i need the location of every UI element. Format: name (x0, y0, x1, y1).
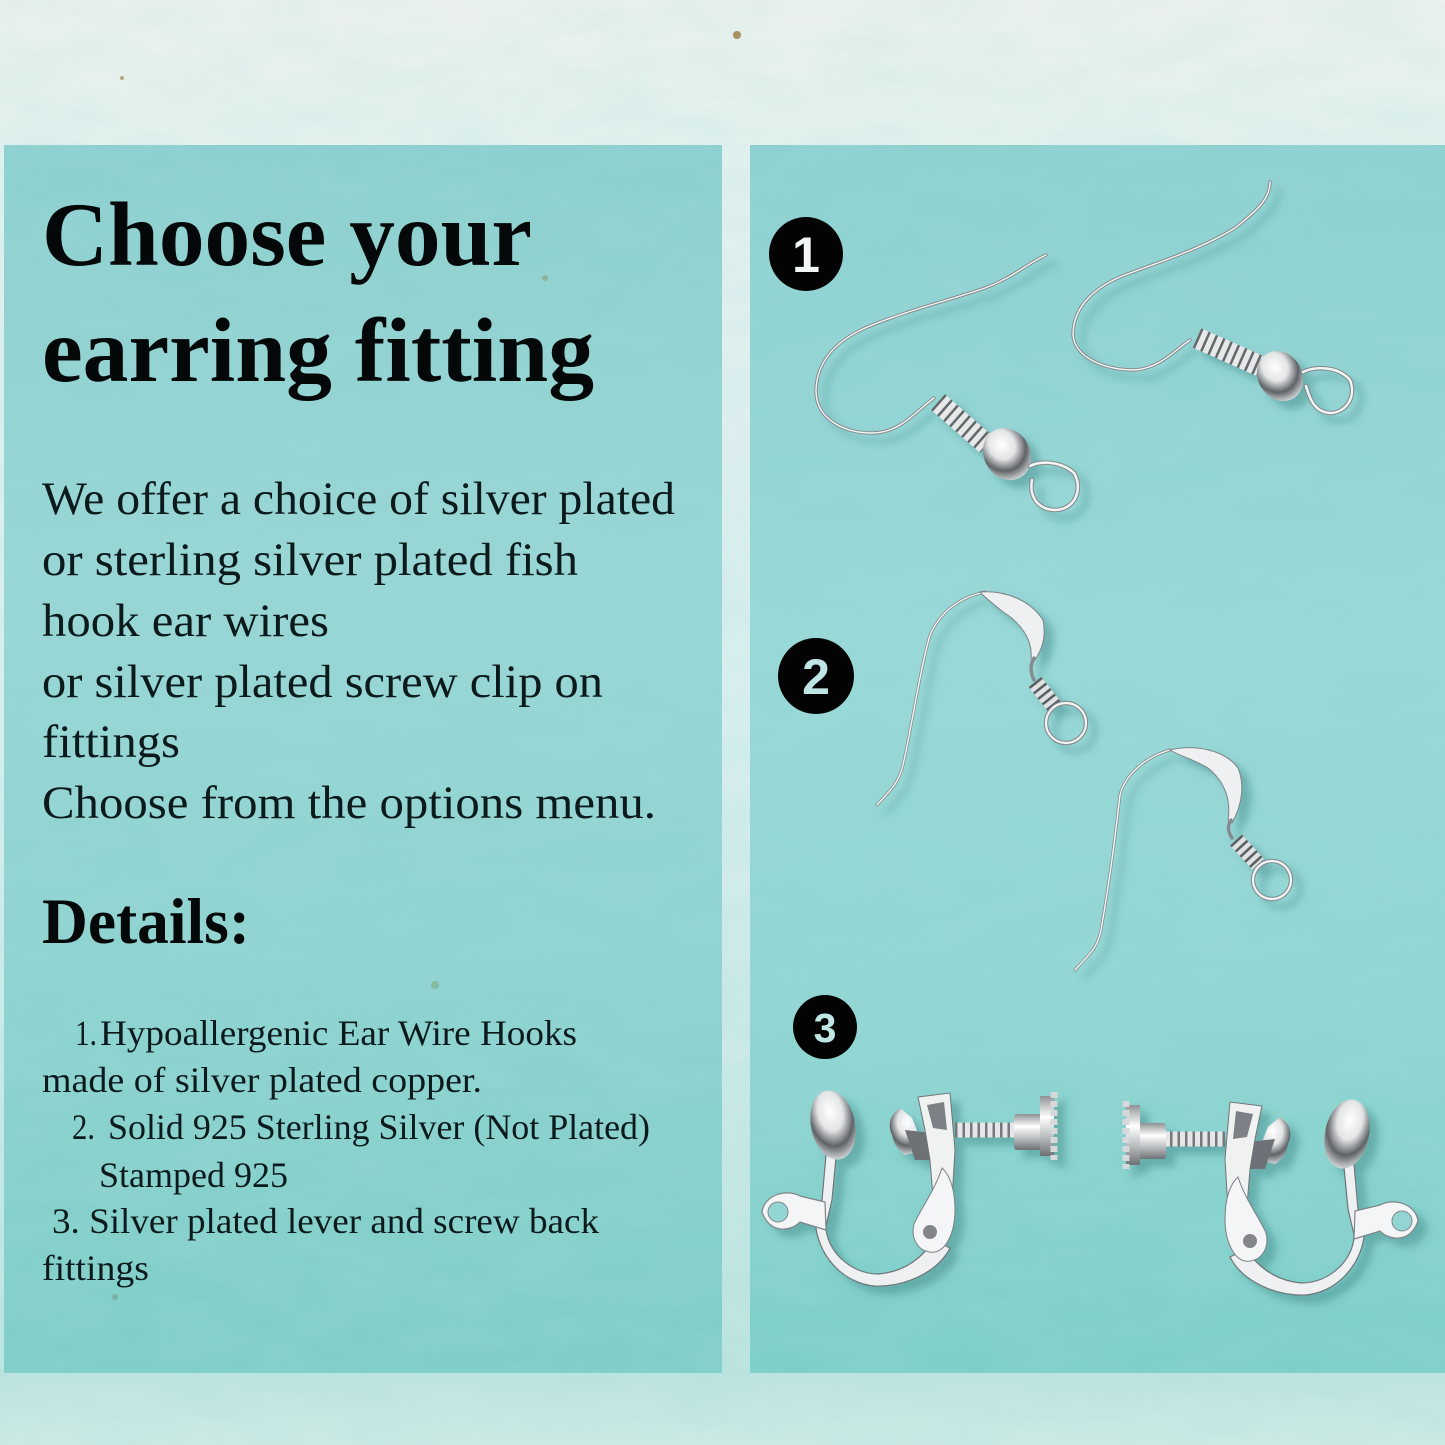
details list: made of silver plated copper. (42, 1060, 482, 1100)
intro text block: or silver plated screw clip on (42, 656, 603, 708)
intro text block: Choose from the options menu. (42, 777, 656, 829)
panel: fittings (750, 145, 1445, 1373)
title (42, 184, 594, 401)
badge 3: 3 (814, 1005, 836, 1051)
badge 3 (793, 995, 857, 1059)
right clip (1126, 1095, 1418, 1295)
details list: Stamped 925 (99, 1155, 288, 1195)
upper wire (877, 592, 1086, 805)
details list: Solid 925 Sterling Silver (Not Plated) (108, 1107, 650, 1147)
fitting 3: screw clip-ons (762, 1086, 1418, 1295)
fitting 2: sterling silver ear wires (877, 592, 1291, 970)
left hook (816, 255, 1078, 510)
intro text block: or sterling silver plated fish (42, 534, 578, 586)
details list: fittings (42, 1248, 149, 1288)
details list: Hypoallergenic Ear Wire Hooks (100, 1013, 577, 1053)
badge 2 (778, 638, 854, 714)
lower wire (1075, 748, 1291, 970)
fitting 1: fish hook ear wires (816, 182, 1352, 510)
details list (42, 1013, 650, 1288)
badge 1: 1 (792, 227, 820, 283)
details list: 1. (75, 1013, 97, 1053)
right hook (1073, 182, 1352, 413)
left clip (762, 1086, 1054, 1286)
details list: 2. (72, 1107, 95, 1147)
details list: 3. Silver plated lever and screw back (52, 1201, 599, 1241)
heading: details: Details: (42, 886, 250, 958)
intro text block (42, 473, 675, 829)
intro text block: fittings (42, 716, 180, 768)
intro text block: We offer a choice of silver plated (42, 473, 675, 525)
title: earring fitting (42, 300, 594, 401)
title: Choose your (42, 184, 532, 285)
panel: text (4, 145, 722, 1373)
badge 2: 2 (802, 649, 830, 705)
badge 1 (769, 217, 843, 291)
intro text block: hook ear wires (42, 595, 329, 647)
